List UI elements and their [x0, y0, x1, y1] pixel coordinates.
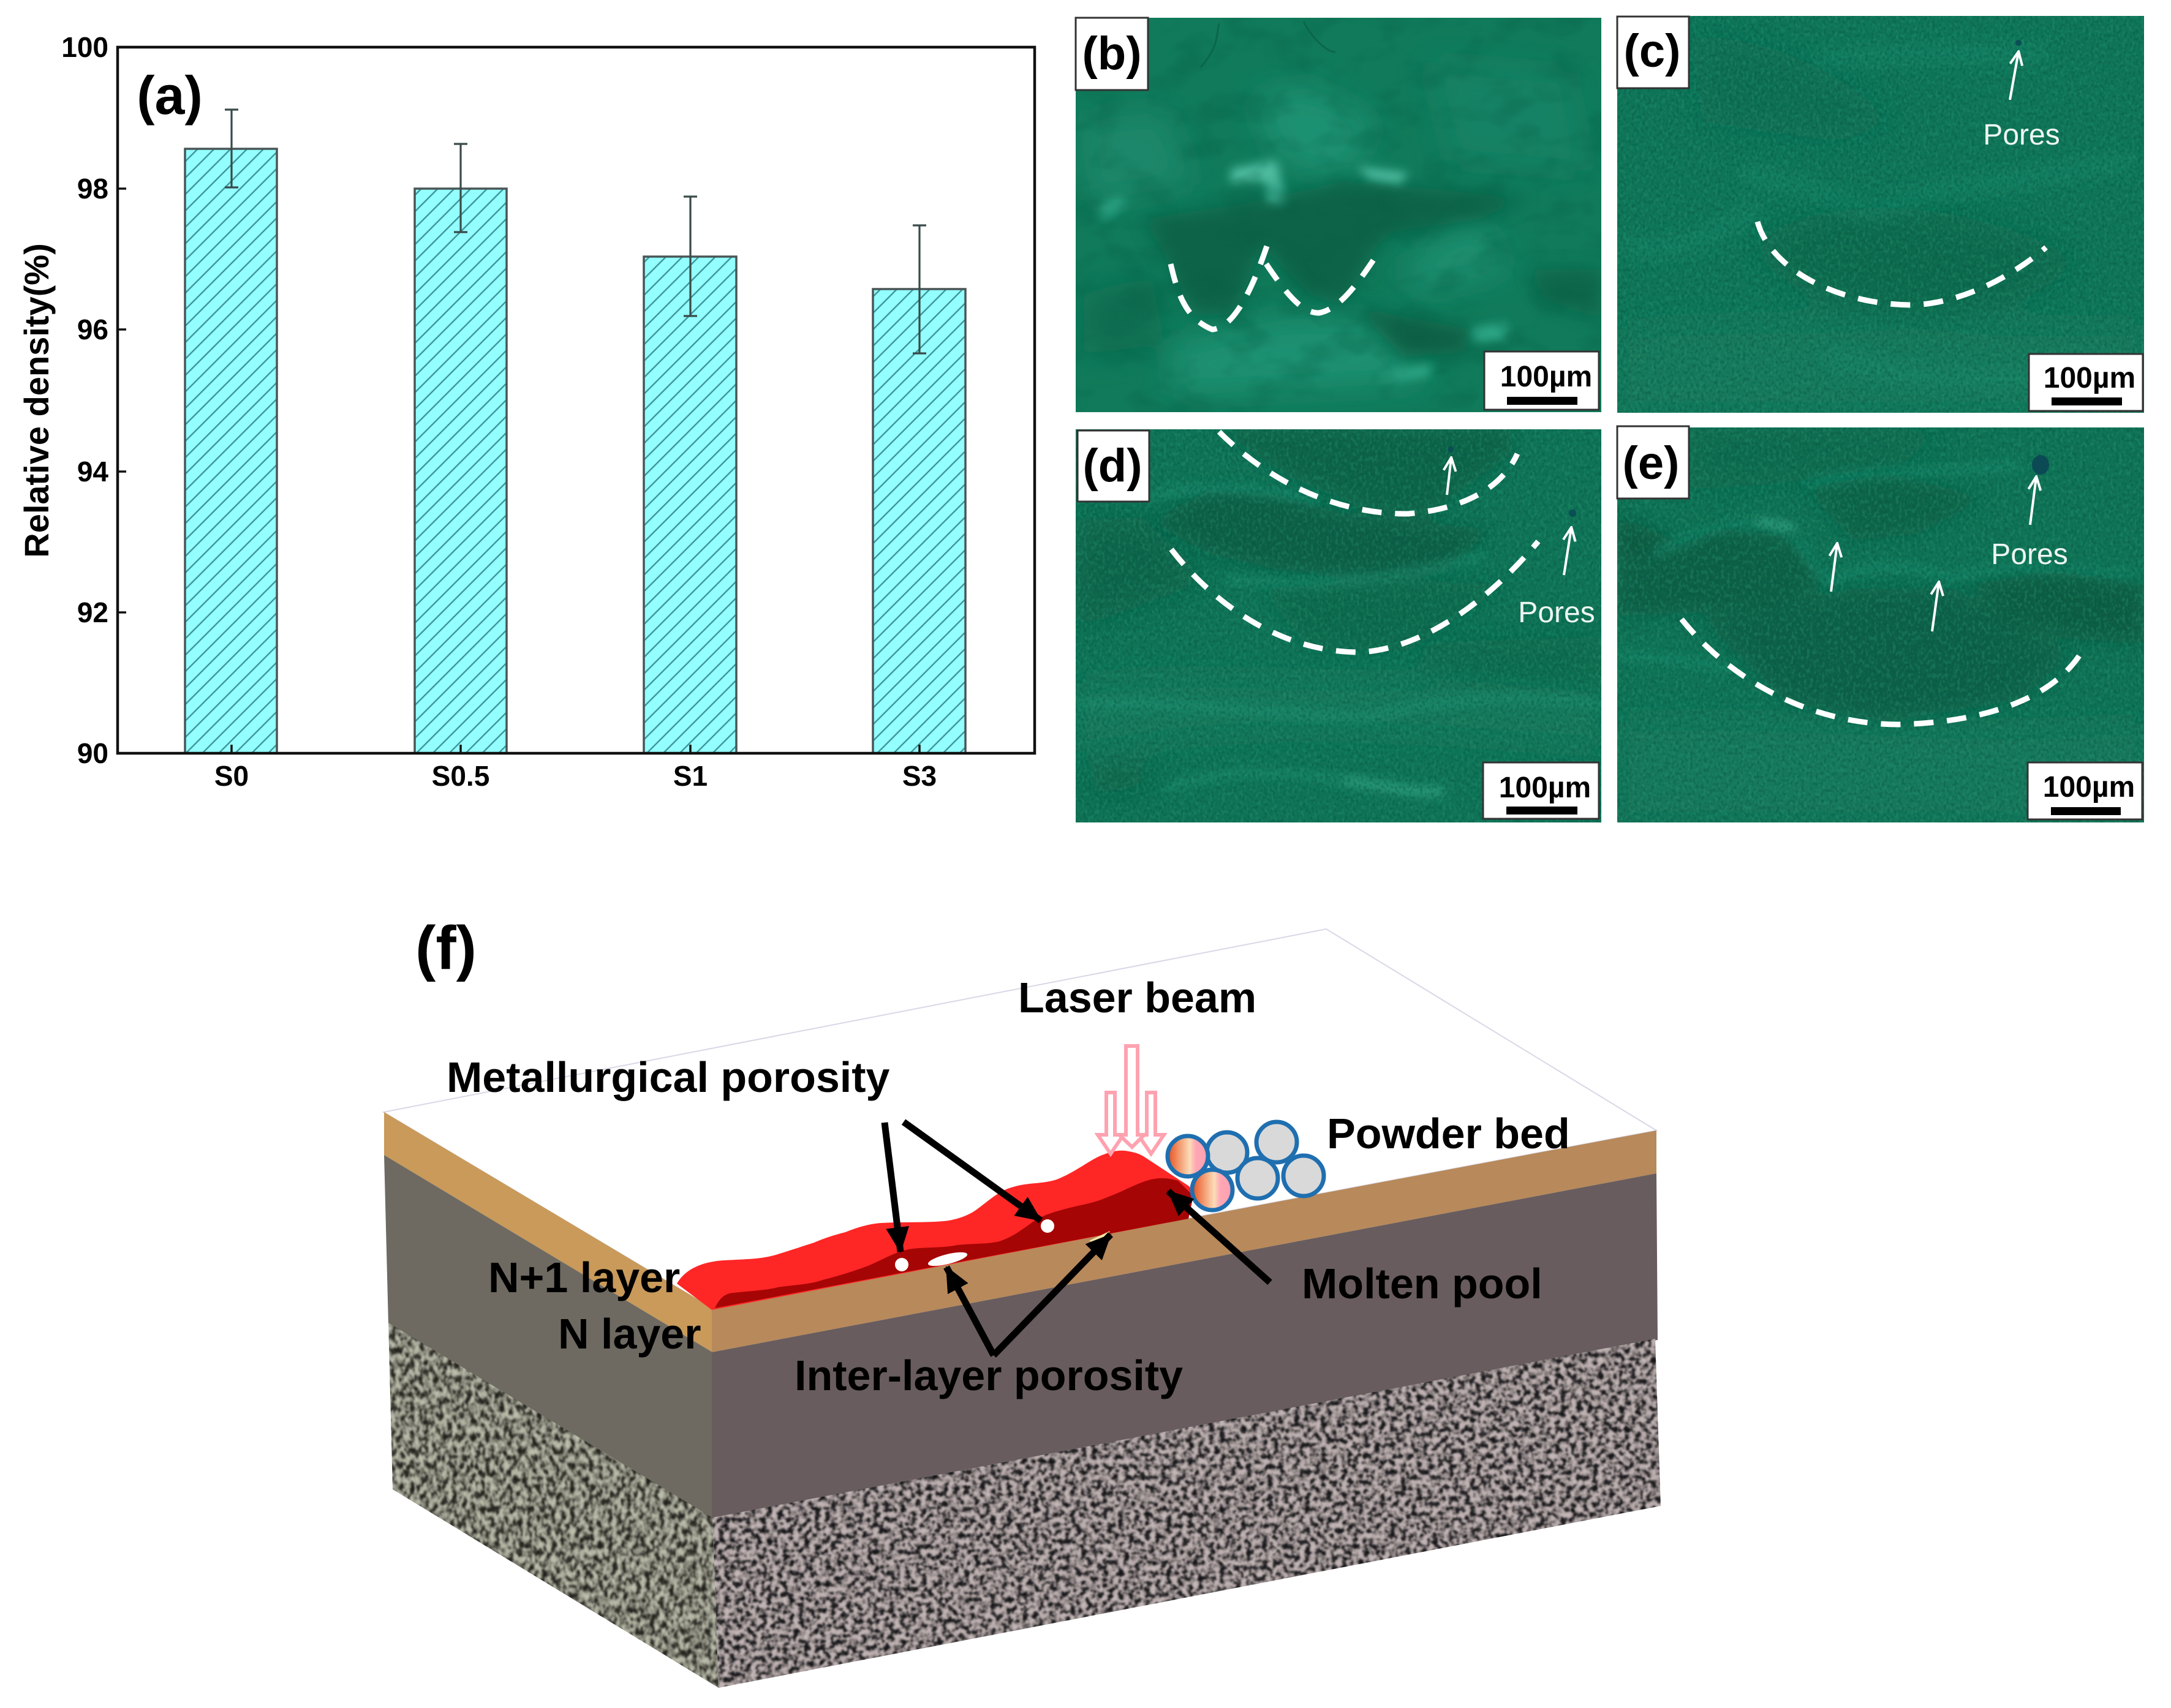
label e: [1617, 426, 1689, 498]
label: N+1 layer: N+1 layer: [488, 1254, 680, 1301]
pores d: [1448, 446, 1576, 517]
label: Molten pool: Molten pool: [1302, 1260, 1542, 1307]
panel a: relative density bar chart: [17, 31, 1035, 792]
laser beam arrows: [1098, 1046, 1164, 1154]
x-axis tick labels: [214, 760, 937, 792]
error bars: [225, 110, 926, 353]
panel e: micrograph: [1617, 427, 2144, 822]
label b: (b): [1082, 28, 1142, 80]
y-axis tick labels: 90: [77, 737, 108, 769]
powder particles: [1168, 1122, 1324, 1210]
scale bar c: [2029, 354, 2143, 411]
arrows e: [1831, 477, 2036, 631]
melt pool boundary c: [1758, 222, 2046, 305]
bar: S0.5: [415, 189, 507, 753]
bar: S0: [185, 149, 277, 753]
chart axes frame: [118, 47, 1035, 753]
melt pool boundary d top: [1219, 432, 1517, 514]
Pores label d: Pores: [1518, 596, 1595, 629]
axis ticks: [118, 189, 919, 753]
panel f: laser powder bed block diagram: [380, 914, 1669, 1696]
label c: (c): [1624, 25, 1680, 77]
label: Inter-layer porosity: Inter-layer porosity: [795, 1352, 1183, 1399]
molten pool: [677, 1151, 1194, 1310]
inter-layer pores: [927, 1231, 1110, 1269]
y-axis tick labels: [61, 31, 108, 769]
x-axis tick labels: S1: [673, 760, 708, 792]
arrow c: [2010, 52, 2018, 100]
melt pool boundary b: [1171, 246, 1267, 329]
panel e overlay: [1617, 426, 2142, 819]
label e: (e): [1623, 437, 1679, 489]
label d: (d): [1082, 440, 1142, 492]
label c: [1617, 17, 1689, 88]
label: Laser beam: Laser beam: [1018, 974, 1256, 1021]
x-axis tick labels: S3: [902, 760, 937, 792]
panel b: micrograph: [1076, 18, 1601, 412]
label d: [1078, 431, 1149, 502]
arrows d: [1447, 458, 1571, 575]
pore c: [2015, 40, 2022, 46]
label: N layer: N layer: [558, 1310, 701, 1358]
label: Powder bed: Powder bed: [1327, 1110, 1570, 1157]
N layer band: [384, 1155, 1658, 1519]
x-axis tick labels: S0: [214, 760, 249, 792]
y-axis tick labels: 100: [61, 31, 108, 63]
panel d overlay: [1078, 431, 1599, 819]
Pores label e: Pores: [1991, 538, 2068, 571]
y-axis tick labels: 92: [77, 596, 108, 628]
melt pool boundary b2: [1266, 250, 1380, 313]
label: Metallurgical porosity: Metallurgical porosity: [447, 1053, 890, 1101]
panel d: micrograph: [1076, 429, 1601, 822]
label b: [1076, 18, 1148, 90]
metallurgical pores: [895, 1219, 1054, 1271]
panel c overlay: [1617, 17, 2143, 411]
panel label a: (a): [137, 65, 203, 126]
melt pool boundary d lower: [1171, 541, 1538, 652]
scale bar e: 100µm: [2043, 771, 2135, 803]
x-axis tick labels: S0.5: [432, 760, 489, 792]
y-axis title: Relative density(%): [17, 243, 56, 558]
scale bar d: 100µm: [1499, 772, 1591, 804]
y-axis tick labels: 96: [77, 314, 108, 345]
scale bar b: 100µm: [1500, 361, 1592, 393]
scale bar b: [1484, 352, 1599, 410]
y-axis tick labels: 94: [77, 456, 108, 487]
scale bar e: [2028, 762, 2142, 819]
panel label f: (f): [415, 914, 477, 982]
callout arrows: [885, 1122, 1270, 1355]
Pores label c: Pores: [1983, 119, 2060, 151]
bar: S1: [644, 257, 736, 753]
melt pool boundary e: [1682, 619, 2079, 724]
scale bar d: [1483, 762, 1599, 819]
panel b overlay: [1076, 18, 1599, 410]
panel c: micrograph: [1617, 16, 2144, 413]
bar: S3: [873, 289, 965, 753]
N+1 layer band: [384, 1112, 1656, 1352]
scale bar c: 100µm: [2044, 362, 2135, 394]
pore e: [2032, 455, 2049, 475]
y-axis tick labels: 98: [77, 173, 108, 205]
block top surface: [383, 929, 1656, 1308]
granite substrate: [380, 1311, 1669, 1696]
